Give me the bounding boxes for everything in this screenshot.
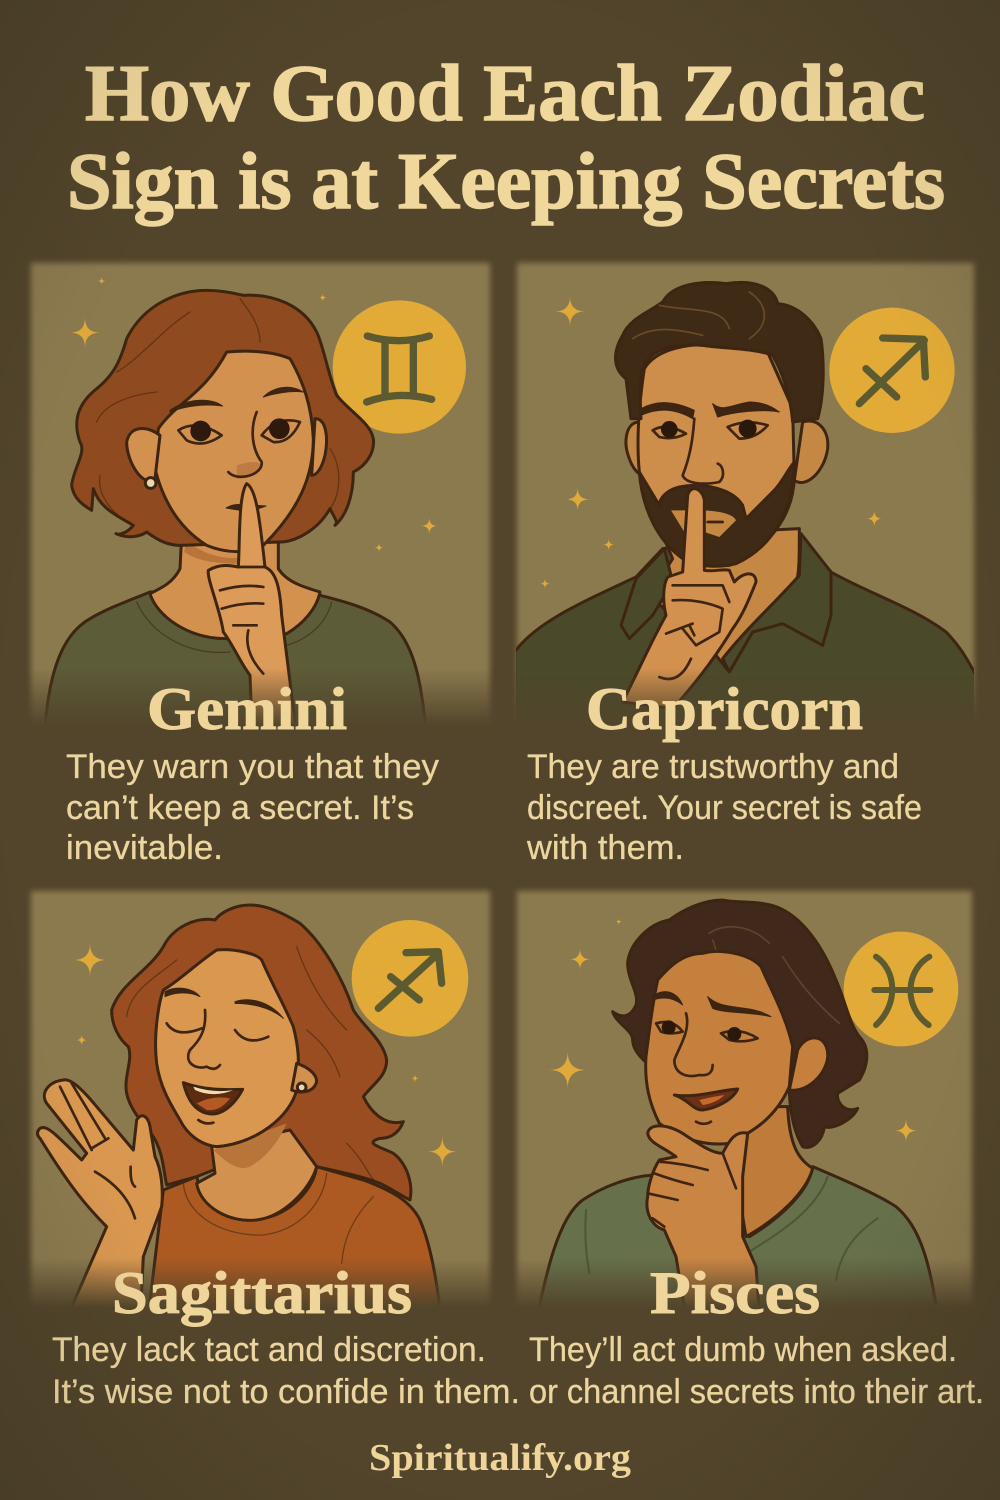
title: How Good Each Zodiac — [85, 50, 925, 138]
text: Capricorn description: discreet. Your secret is safe — [527, 789, 922, 827]
mouth — [183, 1083, 243, 1114]
ears and earring — [127, 429, 160, 481]
icon: sparkles — [540, 296, 883, 589]
ears — [624, 420, 638, 475]
text: Pisces description: They’ll act dumb when asked. — [529, 1331, 957, 1369]
lips — [706, 520, 724, 524]
nose — [683, 419, 723, 484]
text: Pisces description: or channel secrets into their art. — [529, 1373, 984, 1411]
woman with finger to lips — [43, 290, 428, 762]
icon: gemini badge — [333, 300, 466, 434]
face — [155, 351, 313, 552]
collars — [621, 549, 673, 639]
sweater — [44, 590, 426, 720]
title — [67, 50, 945, 226]
nose — [237, 462, 262, 479]
panel: Pisces — [506, 891, 988, 1411]
closed eyes — [167, 1023, 268, 1040]
sweater — [529, 1167, 943, 1357]
hair — [616, 282, 823, 422]
text: Sagittarius description: It’s wise not to confide in them. — [52, 1373, 520, 1411]
hand on chin — [647, 1126, 763, 1357]
neck and chest — [150, 535, 320, 639]
eyebrows — [170, 400, 223, 412]
neck — [197, 1130, 317, 1220]
icon: sparkles — [549, 918, 918, 1142]
footer: Spiritualify.org: Spiritualify.org — [369, 1437, 631, 1479]
panel background — [31, 263, 490, 733]
text: Gemini description: They warn you that they — [66, 748, 439, 786]
panel: Gemini — [20, 263, 502, 867]
panel background — [517, 891, 972, 1313]
heading: Capricorn: Capricorn — [586, 676, 863, 742]
nose — [674, 1013, 713, 1076]
text: Capricorn description — [526, 748, 922, 867]
eyes — [178, 426, 222, 444]
eyebrows — [165, 988, 200, 997]
icon: sagittarius badge — [352, 920, 468, 1037]
text: Gemini description — [66, 748, 439, 867]
panel fade — [506, 1258, 988, 1320]
face — [646, 951, 793, 1144]
title: Sign is at Keeping Secrets — [67, 138, 945, 226]
eyebrows — [641, 403, 694, 419]
icon: sagittarius badge — [829, 308, 955, 433]
text: Capricorn description: with them. — [526, 829, 684, 867]
text: Sagittarius description — [52, 1331, 520, 1411]
panel fade — [20, 1258, 502, 1320]
text: Pisces description — [529, 1331, 984, 1411]
woman talking and waving — [36, 904, 440, 1302]
neck and chest — [649, 529, 799, 672]
text: Sagittarius description: They lack tact and discretion. — [52, 1331, 486, 1369]
heading: Gemini: Gemini — [147, 676, 347, 742]
illustration: Sagittarius — [36, 904, 468, 1302]
eyes — [653, 427, 686, 438]
panel background — [517, 263, 974, 733]
illustration: Gemini — [43, 277, 466, 762]
nose — [188, 1010, 220, 1069]
text: Gemini description: inevitable. — [66, 829, 223, 867]
panel fade — [506, 668, 988, 740]
shirt — [516, 546, 974, 718]
raised hand — [37, 1080, 162, 1357]
hand and finger — [623, 489, 756, 709]
hand and finger — [206, 482, 296, 722]
hair — [112, 905, 411, 1200]
face — [638, 345, 794, 565]
eyes — [656, 1022, 683, 1033]
panel: Capricorn — [506, 263, 988, 867]
neck — [729, 1107, 813, 1237]
man thinking — [529, 900, 943, 1357]
mouth — [674, 1089, 738, 1110]
ear — [789, 1038, 828, 1090]
text: Gemini description: can’t keep a secret. It’s — [66, 789, 414, 827]
icon: sparkles — [70, 277, 438, 552]
ear and earring — [292, 1063, 317, 1092]
illustration: Capricorn — [515, 282, 977, 762]
eyebrows — [653, 992, 683, 1005]
hair — [613, 900, 867, 1147]
panel: Sagittarius — [20, 891, 520, 1411]
icon: pisces badge — [844, 932, 958, 1046]
top — [148, 1165, 440, 1302]
heading: Pisces: Pisces — [650, 1260, 820, 1326]
icon: sparkles — [73, 943, 457, 1167]
panel fade — [20, 668, 502, 740]
heading: Sagittarius: Sagittarius — [112, 1260, 412, 1326]
illustration: Pisces — [529, 900, 958, 1357]
text: Capricorn description: They are trustworthy and — [527, 748, 899, 786]
panel background — [31, 891, 490, 1313]
beard — [639, 462, 794, 566]
hair — [72, 290, 374, 545]
face — [156, 950, 298, 1147]
lips — [226, 504, 266, 510]
man with finger to lips — [515, 282, 977, 762]
